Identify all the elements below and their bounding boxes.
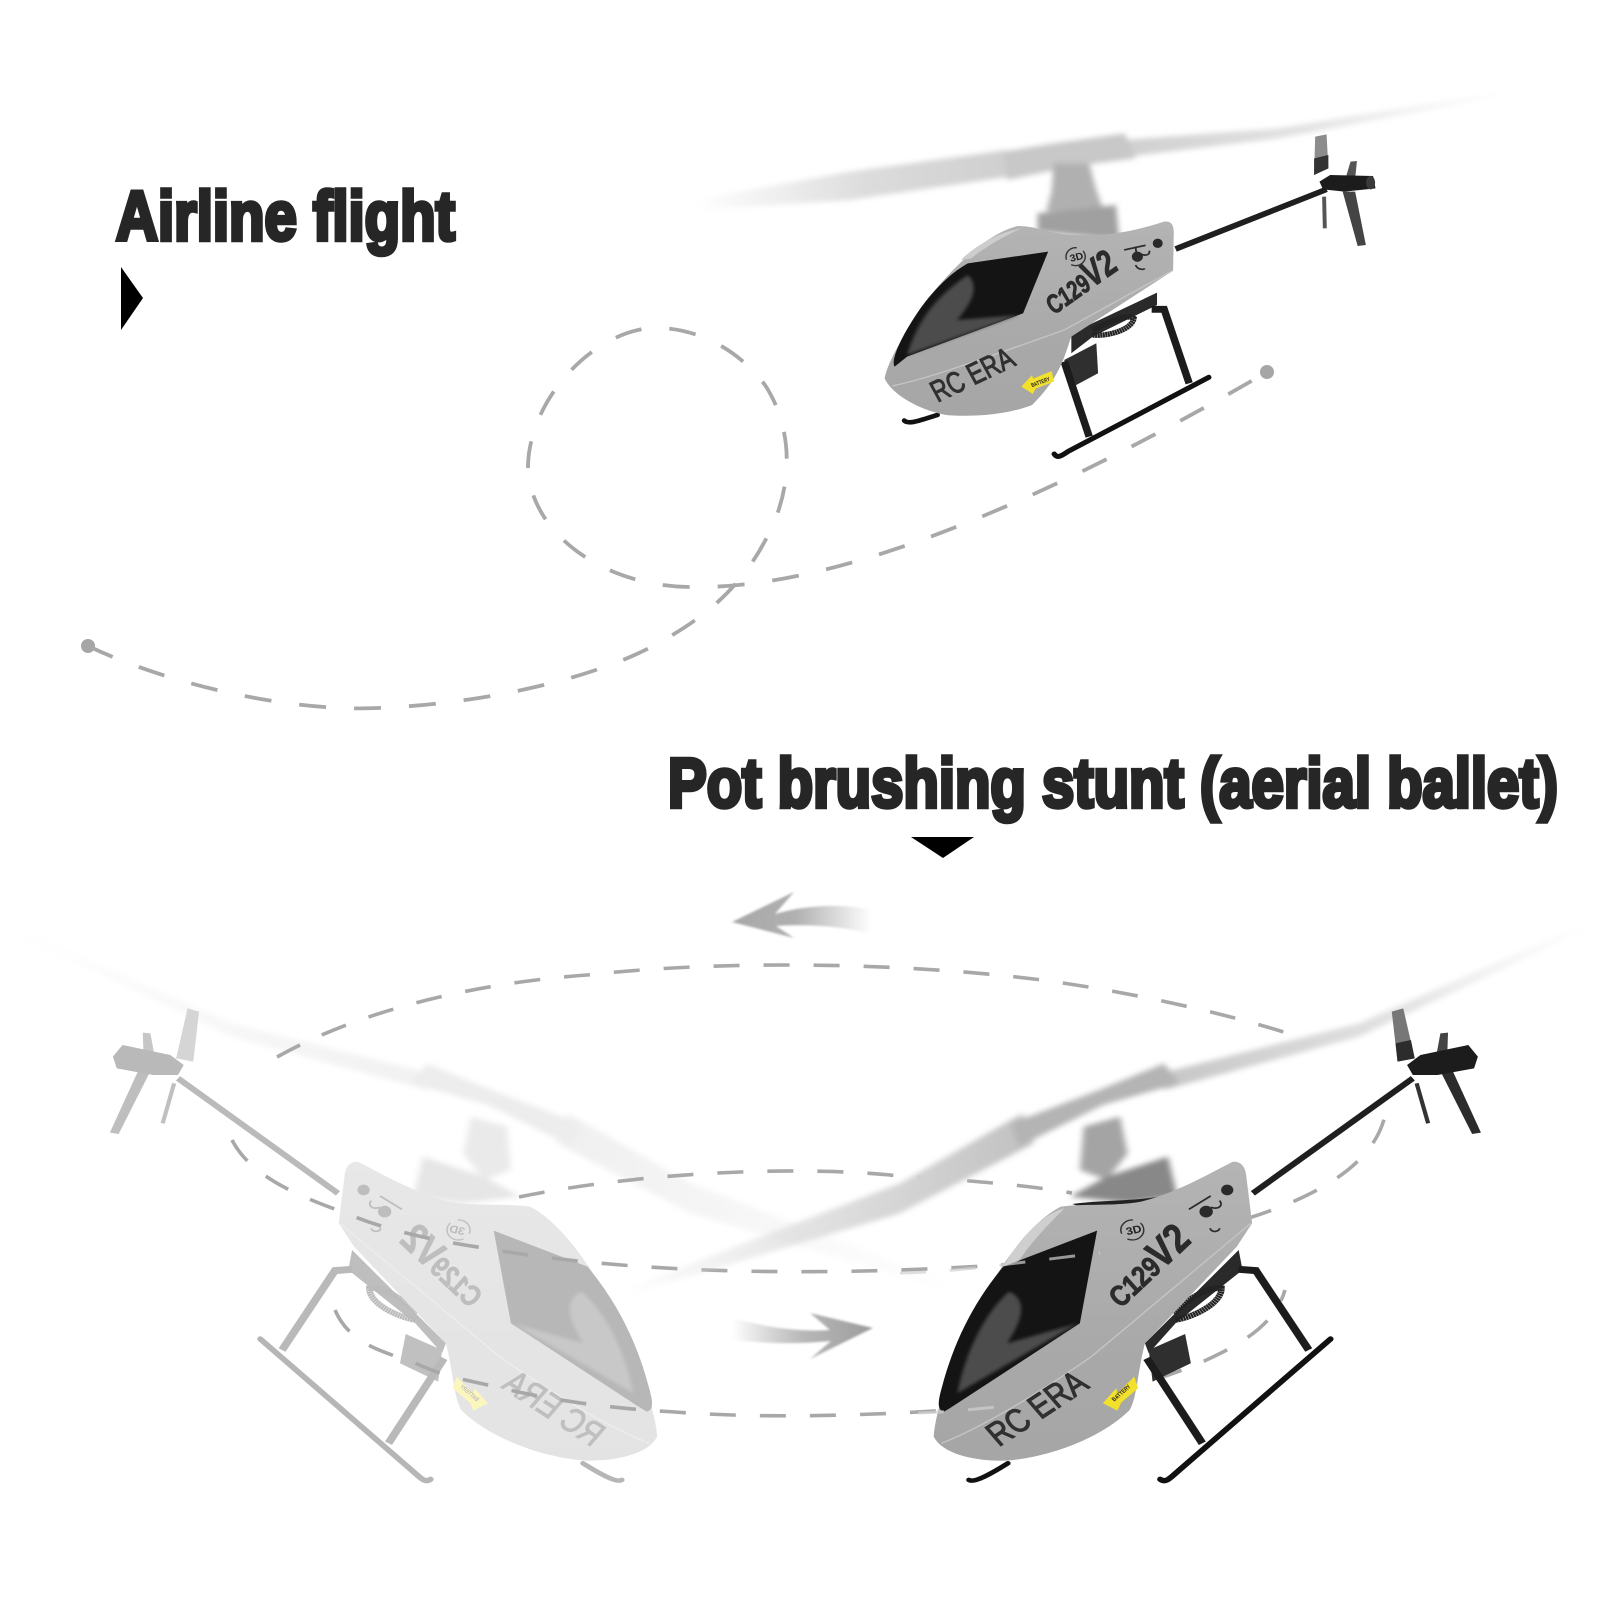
dashed paths: stunt orbit: [232, 965, 1387, 1416]
ghost helicopter icon: [370, 1196, 402, 1231]
small helicopter icon: [1189, 1196, 1221, 1231]
tail boom: [1176, 189, 1327, 249]
window: [894, 252, 1048, 367]
main rotor blur: [694, 90, 1510, 240]
arrow: pointing right: [732, 1313, 873, 1359]
ghost brand: RC ERA: [495, 1363, 613, 1453]
ghost fuselage: [339, 1162, 657, 1461]
helicopter: top, airline flight: [694, 90, 1510, 456]
3D logo: [1121, 1220, 1144, 1240]
model name: C129V2: [1033, 242, 1125, 321]
canopy highlight: [961, 228, 1021, 260]
model name: C129V2: [1092, 1217, 1201, 1314]
helicopter: foreground right: [622, 917, 1600, 1481]
rotor head base: [1072, 1195, 1168, 1207]
ghost seam line: [340, 1223, 649, 1443]
battery sticker: BATTERY: [1031, 377, 1051, 389]
battery sticker: [1021, 371, 1054, 394]
canopy highlight: [1003, 1208, 1065, 1267]
seam line: [892, 271, 1172, 386]
ghost landing gear: [260, 1250, 622, 1481]
ghost model name: C129V2: [390, 1217, 498, 1314]
seam line: [941, 1223, 1251, 1443]
brand: RC ERA: [924, 341, 1020, 409]
ghost rotor blur: [0, 917, 969, 1297]
3D logo: [1066, 248, 1085, 266]
lower loop: [335, 1290, 1285, 1416]
arrow: pointing left: [732, 892, 872, 938]
ghost battery sticker: BATTERY: [458, 1384, 480, 1403]
main orbit lower arc: [232, 1100, 1387, 1272]
ghost tail rotor and fins: [110, 1008, 199, 1134]
main rotor blur: [622, 917, 1600, 1297]
fuselage: [934, 1162, 1252, 1461]
tail boom: [1253, 1078, 1413, 1193]
tail rotor and fins: [1314, 134, 1376, 246]
small helicopter icon: [1124, 245, 1149, 269]
tail rotor and fins: [1392, 1008, 1481, 1134]
landing gear: [969, 1250, 1331, 1481]
upper outer arc: [277, 965, 1287, 1057]
ghost 3D logo: 3D: [448, 1224, 466, 1238]
3D logo: 3D: [1069, 251, 1085, 265]
battery sticker: [1103, 1377, 1138, 1411]
3D logo: 3D: [1125, 1224, 1143, 1238]
ghost window: [494, 1231, 652, 1412]
battery sticker: BATTERY: [1111, 1384, 1133, 1403]
landing gear: [904, 293, 1209, 456]
ghost camera port: [357, 1185, 370, 1195]
title: Airline flight: Airline flight: [116, 177, 455, 255]
ghost battery sticker: [453, 1377, 488, 1411]
ghost 3D logo: [447, 1220, 470, 1240]
icon: down pointer triangle: [911, 837, 974, 858]
faint dashes seen over foreground helicopter: [900, 1253, 1100, 1413]
fuselage: [885, 222, 1174, 416]
ghost tail boom: [178, 1078, 338, 1193]
inner upper arc: [519, 1171, 1072, 1197]
brand: RC ERA: [978, 1363, 1096, 1453]
camera port: [1153, 239, 1163, 248]
camera port: [1221, 1185, 1233, 1195]
window: [939, 1231, 1097, 1412]
icon: right pointer triangle: [121, 267, 143, 330]
flight path: airline route with loop: [81, 328, 1274, 708]
helicopter: ghost mirrored: [0, 917, 969, 1481]
